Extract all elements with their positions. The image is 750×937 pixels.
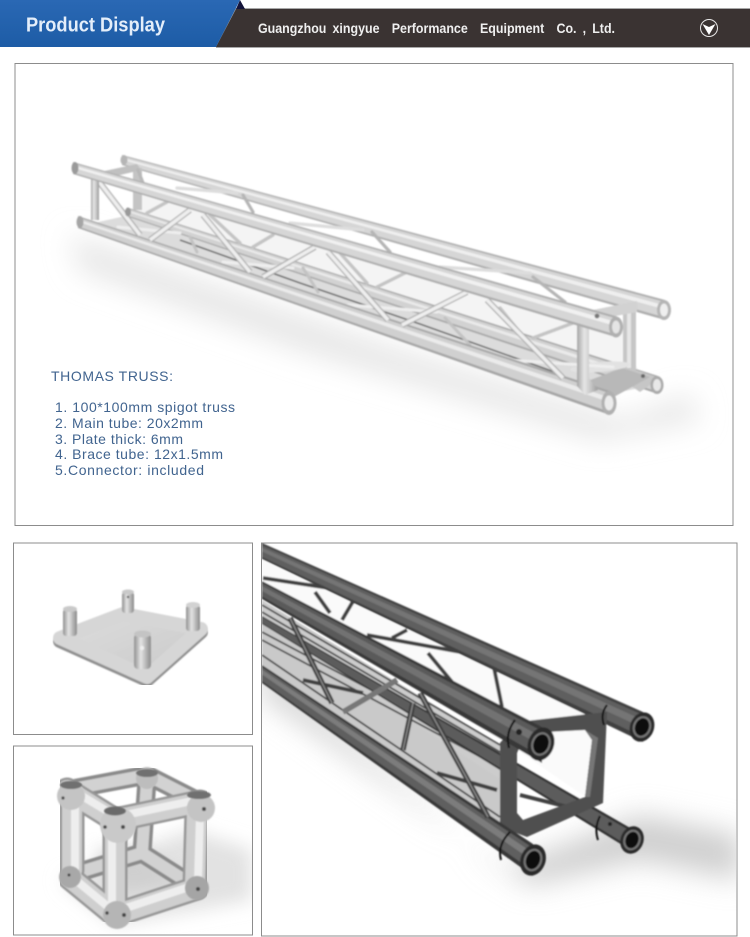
front end frames — [91, 176, 99, 220]
back braces — [147, 202, 573, 345]
spec items: 2. Main tube: 20x2mm — [55, 415, 203, 431]
spec items: 4. Brace tube: 12x1.5mm — [55, 446, 223, 462]
blue title tab — [0, 0, 240, 47]
header title: Product Display — [26, 14, 166, 36]
cube illustration — [57, 767, 252, 929]
top front tube — [262, 581, 542, 763]
interior — [262, 625, 500, 822]
dark company band — [216, 9, 750, 47]
bottom panel braces — [118, 227, 613, 367]
far lattice lines — [262, 604, 501, 818]
back tube, bottom — [127, 208, 658, 394]
dark truss illustration — [262, 543, 740, 885]
spec heading: THOMAS TRUSS: — [51, 368, 173, 384]
bottom front tube — [262, 665, 533, 876]
spec items — [55, 399, 235, 478]
spec items: 5.Connector: included — [55, 462, 204, 478]
bottom back tube — [262, 616, 632, 851]
company name: Guangzhou xingyue Performance Equipment Co. , Ltd. — [258, 20, 615, 36]
panel: dark truss close-up photo — [262, 543, 740, 936]
spec items: 3. Plate thick: 6mm — [55, 431, 183, 447]
panel: base plate photo — [14, 543, 252, 734]
collars and tube ends — [500, 705, 658, 879]
spec items: 1. 100*100mm spigot truss — [55, 399, 235, 415]
icon: chevron badge — [700, 20, 718, 36]
base plate illustration — [60, 590, 201, 680]
back end frame, near — [615, 312, 652, 392]
header bar — [0, 0, 750, 48]
truss illustration — [70, 155, 700, 440]
front braces — [100, 183, 563, 378]
back tube, top — [122, 155, 665, 320]
corner nodes — [57, 767, 215, 929]
front braces — [290, 618, 488, 817]
back tubes — [67, 775, 200, 888]
panel: cube connector photo — [14, 746, 252, 935]
spec list text — [51, 368, 235, 478]
end frame — [500, 712, 607, 837]
top panel braces — [263, 578, 580, 810]
front tubes — [67, 790, 200, 915]
tube ends — [657, 300, 671, 320]
truss interior shading — [85, 215, 655, 395]
front lower tube — [78, 216, 610, 415]
panel: main truss photo — [15, 64, 733, 526]
top back tube — [262, 543, 643, 742]
front upper tube — [73, 162, 617, 338]
posts — [63, 590, 200, 669]
top panel braces — [138, 170, 565, 302]
back end frame, far — [133, 168, 142, 210]
